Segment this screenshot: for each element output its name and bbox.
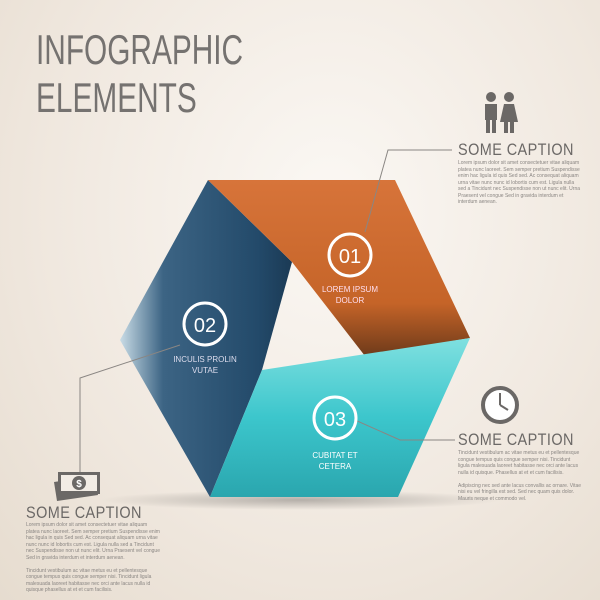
icon: money: $ [76,479,82,490]
title [36,26,243,121]
text: right: Adipiscing nec sed ante lacus convallis ac ornare. Vitae nisi eu vel fringilla est sed. Sed nec quam quis dolor. Mauris neque et commodo vel. [458,482,581,502]
badge 03: CETERA [319,462,352,471]
caption: right: SOME CAPTION [458,430,574,449]
badge 02: VUTAE [192,366,218,375]
text: bottom left: Tincidunt vestibulum ac vitae metus eu et pellentesque congue tempus quis congue semper nisi. Tincidunt ligula malesuada laoreet habitasse nec orci ante lacus nulla id quisque phasellus at et et cum facilisis. [26,568,151,593]
badge 03 [312,397,358,471]
shape: blue segment [120,180,292,497]
text: bottom left: Lorem ipsum dolor sit amet consectetuer vitae aliquam platea nunc laoreet. Sem semper pretium Suspendisse enim hac ligula in quis Sed sed. Ac consequat aliquam urna vitae nunc nunc id lobortis cum est. Ligula nulla sed a Tincidunt nec Suspendisse non ut nunc elit. Urna Praesent vel congue Sed in gravida interdum et interdum aenean. [26,522,160,560]
caption: bottom left: SOME CAPTION [26,503,142,522]
icon: money [54,472,100,501]
badge 01: 01 [339,246,361,268]
shape: teal segment [210,338,470,497]
badge 01 [322,234,378,305]
badge 01: LOREM IPSUM [322,285,378,294]
caption: top right: SOME CAPTION [458,140,574,159]
callout lines [80,150,455,472]
icon: clock [483,388,517,422]
badge 03: 03 [324,409,346,431]
badge 02: INCULIS PROLIN [173,355,237,364]
text: right [458,450,581,502]
title: ELEMENTS [36,74,197,121]
badge 02 [173,303,237,375]
icon: people [485,92,518,133]
title: INFOGRAPHIC [36,26,243,73]
badge 01: DOLOR [336,296,364,305]
shape: orange segment [208,180,470,356]
text: bottom left [26,522,160,593]
text: right: Tincidunt vestibulum ac vitae metus eu et pellentesque congue tempus quis congue semper nisi. Tincidunt ligula malesuada laoreet habitasse nec orci ante lacus nulla id quisque. Phasellus at et et cum facilisis. [458,450,579,476]
badge 02: 02 [194,315,216,337]
text: top right: Lorem ipsum dolor sit amet consectetuer vitae aliquam platea nunc laoreet. Sem semper pretium Suspendisse enim hac ligula id quis Sed sed. Ac consequat aliquam urna vitae nunc nunc id lobortis cum est. Ligula nulla sed a Tincidunt nec Suspendisse non ut nunc elit. Urna Praesent vel congue Sed in gravida interdum et interdum aenean. [458,160,580,205]
badge 03: CUBITAT ET [312,451,358,460]
